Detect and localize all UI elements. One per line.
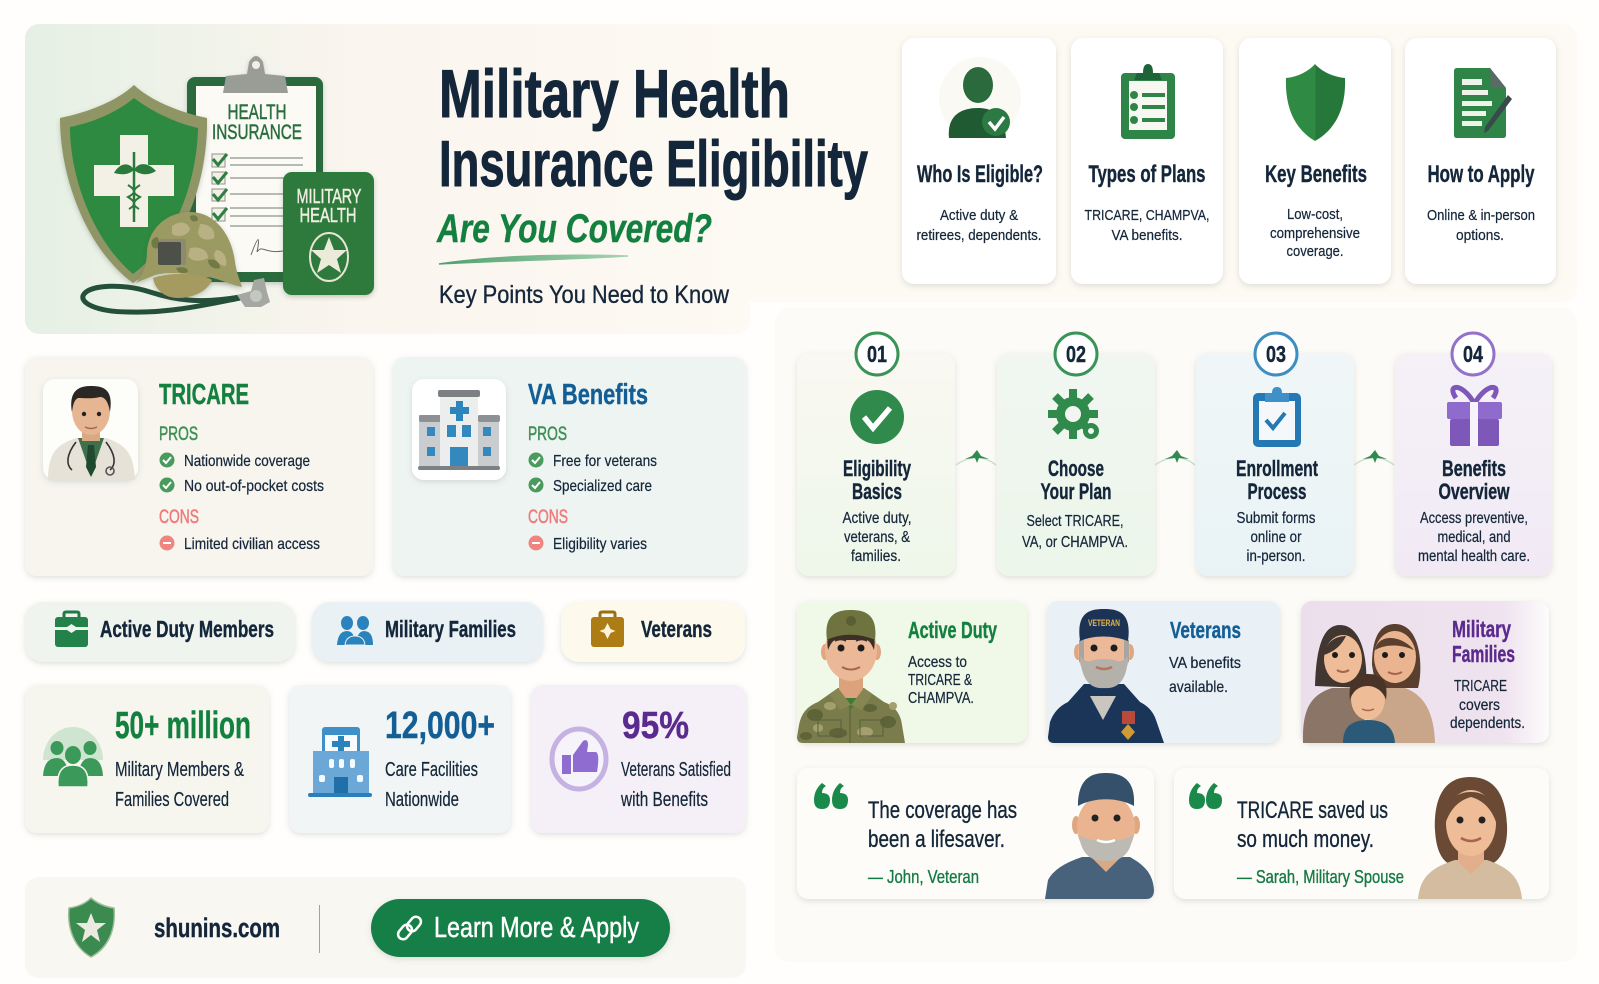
description: medical, and xyxy=(1438,529,1510,546)
quote text xyxy=(868,797,1017,853)
cons xyxy=(159,507,320,553)
description xyxy=(1022,513,1128,551)
illustration: military health card: HEALTH xyxy=(300,205,356,227)
badge 03: 03 xyxy=(1266,341,1286,367)
description xyxy=(1084,207,1210,244)
description: Active duty & xyxy=(940,207,1018,224)
cons: Eligibility varies xyxy=(553,536,647,553)
card: active duty: Access to xyxy=(908,654,967,671)
title: Overview xyxy=(1438,479,1510,504)
card: military families: TRICARE xyxy=(1454,678,1507,695)
title xyxy=(843,456,912,504)
description: VA, or CHAMPVA. xyxy=(1022,534,1128,551)
card: who is eligible xyxy=(902,38,1056,284)
arrow 1 xyxy=(956,450,996,465)
footer bar xyxy=(25,877,746,978)
cons xyxy=(528,507,647,553)
heading: Key Benefits xyxy=(1265,161,1367,188)
card: veterans: available. xyxy=(1169,679,1228,696)
attribution: — Sarah, Military Spouse xyxy=(1237,867,1404,887)
description: coverage. xyxy=(1286,243,1344,260)
stat: care facilities: Nationwide xyxy=(385,789,459,811)
badge 01 xyxy=(856,333,898,375)
subtitle: Are You Covered? xyxy=(436,207,712,251)
button: learn more and apply: Learn More & Apply xyxy=(434,912,639,944)
description xyxy=(916,207,1042,244)
badge 01: 01 xyxy=(867,341,887,367)
step 01 xyxy=(797,333,955,576)
avatar: doctor xyxy=(43,379,138,480)
stat: veterans satisfied xyxy=(531,685,746,833)
card: active duty: TRICARE & xyxy=(908,672,972,689)
quote text: The coverage has xyxy=(868,797,1017,824)
heading: Types of Plans xyxy=(1088,161,1206,188)
illustration: clipboard xyxy=(187,56,323,282)
pros: PROS xyxy=(159,424,198,445)
card: military families: covers xyxy=(1459,697,1500,714)
description: VA benefits. xyxy=(1112,227,1182,244)
quote text xyxy=(1237,797,1388,853)
description: TRICARE, CHAMPVA, xyxy=(1084,207,1210,224)
description xyxy=(842,510,912,565)
title: Enrollment xyxy=(1236,456,1318,481)
panel: top feature cards xyxy=(902,38,1556,284)
arrow 2 xyxy=(1155,450,1195,465)
icon: blue hospital xyxy=(308,727,372,797)
description: comprehensive xyxy=(1270,225,1360,242)
description: options. xyxy=(1456,227,1504,244)
card: military families: Military xyxy=(1452,616,1511,642)
pros: No out-of-pocket costs xyxy=(184,478,324,495)
title: Benefits xyxy=(1442,456,1506,481)
title: Eligibility xyxy=(843,456,912,481)
badge 04: 04 xyxy=(1463,341,1483,367)
icon: group of people xyxy=(43,727,103,787)
description: retirees, dependents. xyxy=(916,227,1042,244)
cons: CONS xyxy=(159,507,199,528)
description: Select TRICARE, xyxy=(1026,513,1124,530)
illustration: military health card: MILITARY xyxy=(296,186,362,208)
stat: care facilities: 12,000+ xyxy=(385,705,495,747)
card: how to apply xyxy=(1405,38,1556,284)
card: veterans xyxy=(1047,601,1280,743)
quote text: TRICARE saved us xyxy=(1237,797,1388,824)
card: types of plans xyxy=(1071,38,1223,284)
badge 04 xyxy=(1452,333,1494,375)
heading: TRICARE xyxy=(159,379,249,411)
badge 03 xyxy=(1255,333,1297,375)
top band background xyxy=(25,24,1577,302)
step 02 xyxy=(997,333,1155,576)
heading: Who Is Eligible? xyxy=(917,161,1043,188)
pill: veterans: Veterans xyxy=(641,616,712,642)
illustration: military health card xyxy=(283,172,374,295)
title: Process xyxy=(1248,479,1306,504)
cons: Limited civilian access xyxy=(184,536,320,553)
pros: Specialized care xyxy=(553,478,652,495)
icon: clipboard list xyxy=(1121,64,1175,139)
title: Basics xyxy=(852,479,902,504)
step 04 xyxy=(1395,333,1552,576)
tagline: Key Points You Need to Know xyxy=(439,281,730,309)
description: veterans, & xyxy=(844,529,911,546)
description: Submit forms xyxy=(1236,510,1316,527)
website: shunins.com xyxy=(154,913,280,943)
description: Access preventive, xyxy=(1420,510,1528,527)
card: active duty xyxy=(797,601,1027,743)
title: Choose xyxy=(1048,456,1104,481)
portrait: soldier xyxy=(797,610,905,743)
pros: PROS xyxy=(528,424,567,445)
panel: tricare xyxy=(25,357,373,576)
quote mark xyxy=(1189,783,1222,809)
stat: members covered: 50+ million xyxy=(115,705,251,747)
description: online or xyxy=(1250,529,1302,546)
description: Online & in-person xyxy=(1427,207,1535,224)
stat: veterans satisfied: 95% xyxy=(622,705,689,747)
badge 02 xyxy=(1055,333,1097,375)
description xyxy=(1418,510,1530,565)
description xyxy=(1270,206,1360,260)
title: Your Plan xyxy=(1040,479,1112,504)
icon: link xyxy=(396,915,423,941)
icon: star shield logo xyxy=(69,898,114,957)
title: Military Health xyxy=(439,56,790,132)
illustration: clipboard: HEALTH xyxy=(228,101,286,124)
cons: CONS xyxy=(528,507,568,528)
icon: hospital tile xyxy=(412,379,506,480)
description: families. xyxy=(851,548,901,565)
attribution: — John, Veteran xyxy=(868,867,979,887)
title xyxy=(1236,456,1318,504)
icon: clipboard check xyxy=(1253,387,1301,447)
description xyxy=(1427,207,1535,244)
portrait: veteran xyxy=(1048,609,1164,743)
illustration: clipboard: INSURANCE xyxy=(212,121,302,144)
accent swoosh xyxy=(439,255,628,264)
stat: care facilities: Care Facilities xyxy=(385,759,478,781)
stat: members covered xyxy=(25,685,269,833)
pill: military families xyxy=(312,602,543,662)
panel: va benefits xyxy=(393,357,746,576)
illustration: helmet xyxy=(136,212,242,298)
pros: Free for veterans xyxy=(553,453,657,470)
card: active duty: CHAMPVA. xyxy=(908,690,974,707)
pill: military families: Military Families xyxy=(385,616,516,642)
portrait: john xyxy=(1045,773,1154,899)
title xyxy=(439,56,868,200)
pill: veterans xyxy=(561,602,745,662)
icon: blue people xyxy=(337,616,373,645)
panel: hero xyxy=(25,24,868,334)
title xyxy=(1040,456,1112,504)
stat: care facilities xyxy=(289,685,511,833)
quote text: so much money. xyxy=(1237,826,1374,853)
stat: veterans satisfied: with Benefits xyxy=(620,789,708,811)
badge 02: 02 xyxy=(1066,341,1086,367)
stat: members covered: Families Covered xyxy=(115,789,229,811)
icon: gift xyxy=(1447,387,1502,446)
description: in-person. xyxy=(1246,548,1306,565)
portrait: sarah xyxy=(1418,777,1522,899)
icon: gears xyxy=(1048,389,1099,439)
step 03 xyxy=(1196,333,1354,576)
card: military families: Families xyxy=(1452,641,1515,667)
portrait: veteran: VETERAN xyxy=(1088,618,1120,628)
description xyxy=(1236,510,1316,565)
icon: thumbs up xyxy=(552,729,606,789)
icon: person with check xyxy=(939,57,1021,139)
card: key benefits xyxy=(1239,38,1391,284)
pill: active duty members xyxy=(25,602,295,662)
right column background xyxy=(775,308,1577,962)
title: Insurance Eligibility xyxy=(439,127,868,200)
stat: veterans satisfied: Veterans Satisfied xyxy=(621,759,731,781)
quote text: been a lifesaver. xyxy=(868,826,1005,853)
testimonial: john xyxy=(797,768,1154,899)
testimonial: sarah xyxy=(1174,768,1549,899)
illustration: shield xyxy=(60,85,207,283)
panel: process steps xyxy=(797,333,1552,576)
portrait: family xyxy=(1303,624,1435,743)
button: learn more and apply xyxy=(371,899,670,957)
pill: active duty members: Active Duty Members xyxy=(100,616,274,642)
illustration: stethoscope xyxy=(83,278,270,312)
card: military families xyxy=(1301,601,1549,743)
icon: shield xyxy=(1286,64,1345,141)
card: military families: dependents. xyxy=(1450,715,1525,732)
icon: gold case xyxy=(591,612,624,647)
heading: VA Benefits xyxy=(528,379,648,411)
card: active duty: Active Duty xyxy=(908,617,997,643)
card: veterans: Veterans xyxy=(1170,617,1241,643)
icon: document with pen xyxy=(1454,68,1512,138)
description: Low-cost, xyxy=(1287,206,1343,223)
arrow 3 xyxy=(1354,450,1394,465)
card: veterans: VA benefits xyxy=(1169,655,1241,672)
icon: check circle xyxy=(850,390,904,444)
description: Active duty, xyxy=(842,510,912,527)
title xyxy=(1438,456,1510,504)
pros: Nationwide coverage xyxy=(184,453,310,470)
icon: green briefcase xyxy=(55,612,88,647)
pros xyxy=(159,424,324,495)
description: mental health care. xyxy=(1418,548,1530,565)
stat: members covered: Military Members & xyxy=(115,759,244,781)
quote mark xyxy=(814,783,848,809)
heading: How to Apply xyxy=(1428,161,1535,188)
pros xyxy=(528,424,657,495)
